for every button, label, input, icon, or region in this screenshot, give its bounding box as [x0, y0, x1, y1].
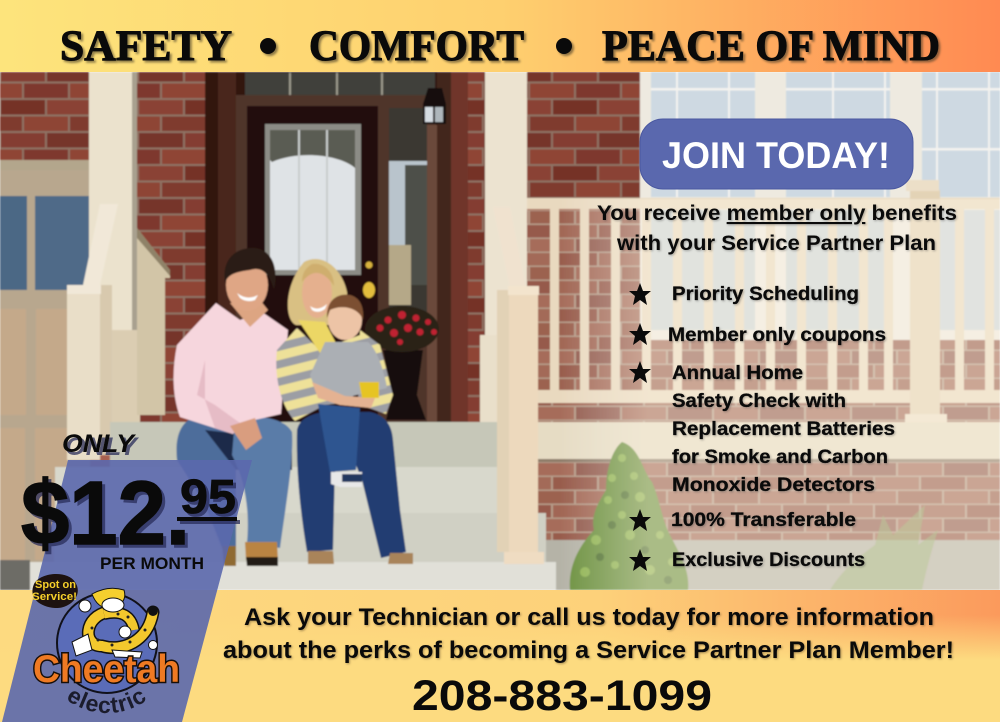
- call to action text: about the perks of becoming a Service Partner Plan Member!: [223, 637, 954, 664]
- benefits intro text: [597, 202, 957, 255]
- left porch column and railing: [67, 72, 170, 460]
- child: [310, 295, 387, 487]
- benefit: annual home safety check: Safety Check with: [672, 391, 846, 412]
- call to action text: Ask your Technician or call us today for more information: [244, 604, 934, 631]
- right brick wall: [527, 72, 641, 202]
- benefits intro text: with your Service Partner Plan: [616, 232, 936, 255]
- benefit: exclusive discounts: Exclusive Discounts: [672, 550, 865, 571]
- lantern: [423, 88, 446, 124]
- benefit: annual home safety check: Monoxide Detectors: [672, 475, 875, 496]
- headline: COMFORT: [309, 23, 524, 70]
- benefits intro text: You receive member only benefits: [597, 202, 957, 225]
- price: cents: 95: [180, 471, 236, 524]
- price block: [21, 430, 237, 564]
- porch railing: [527, 180, 1000, 422]
- woman: [276, 259, 413, 564]
- photo: family on porch steps: [0, 72, 1000, 590]
- spot on service badge: [32, 574, 78, 608]
- label: only: ONLY: [62, 430, 136, 458]
- headline: [60, 23, 940, 70]
- shrubs: [570, 442, 938, 590]
- spot on service badge: Service!: [32, 591, 77, 603]
- family: [174, 248, 439, 566]
- cheetah mascot: [72, 588, 158, 658]
- logo: cheetah electric: [32, 574, 180, 714]
- blue price parallelogram: [2, 460, 252, 722]
- benefit: annual home safety check: [629, 361, 895, 496]
- benefit: priority scheduling: Priority Scheduling: [672, 284, 859, 305]
- top banner: [0, 0, 1000, 72]
- flowers and urn: [365, 306, 439, 420]
- spot on service badge: Spot on: [35, 579, 76, 591]
- headline: PEACE OF MIND: [602, 23, 940, 70]
- lower wall and ground: [538, 422, 1000, 590]
- label: per month: PER MONTH: [100, 554, 204, 573]
- stair railing: [493, 207, 544, 564]
- windows: [640, 72, 1000, 342]
- electric arc guide: [45, 673, 169, 713]
- headline: SAFETY: [60, 23, 232, 70]
- man: [174, 248, 292, 566]
- right porch column: [480, 72, 527, 423]
- join today button: [640, 119, 913, 189]
- benefit: transferable: 100% Transferable: [671, 510, 856, 531]
- light haze behind benefits: [560, 199, 1000, 590]
- logo circle: [57, 593, 157, 693]
- benefit: annual home safety check: for Smoke and Carbon: [672, 447, 888, 468]
- concrete steps: [0, 422, 556, 590]
- benefit: member only coupons: Member only coupons: [668, 325, 886, 346]
- join today button: JOIN TODAY!: [662, 135, 890, 176]
- benefit: annual home safety check: Annual Home: [672, 363, 803, 384]
- cheetah wordmark: Cheetah: [33, 648, 180, 691]
- left brick wall: [0, 72, 90, 164]
- price: dollars: $12.: [21, 464, 190, 564]
- phone number: 208-883-1099: [412, 672, 712, 720]
- right brick below rail: [527, 210, 640, 422]
- benefits list: [629, 283, 895, 571]
- electric label: electric: [68, 691, 146, 714]
- call to action text: [223, 604, 954, 664]
- brick wall behind door: [136, 72, 208, 424]
- benefit: annual home safety check: Replacement Batteries: [672, 419, 895, 440]
- garage door: [0, 160, 90, 562]
- bottom band: [0, 590, 1000, 722]
- front door: [205, 72, 485, 424]
